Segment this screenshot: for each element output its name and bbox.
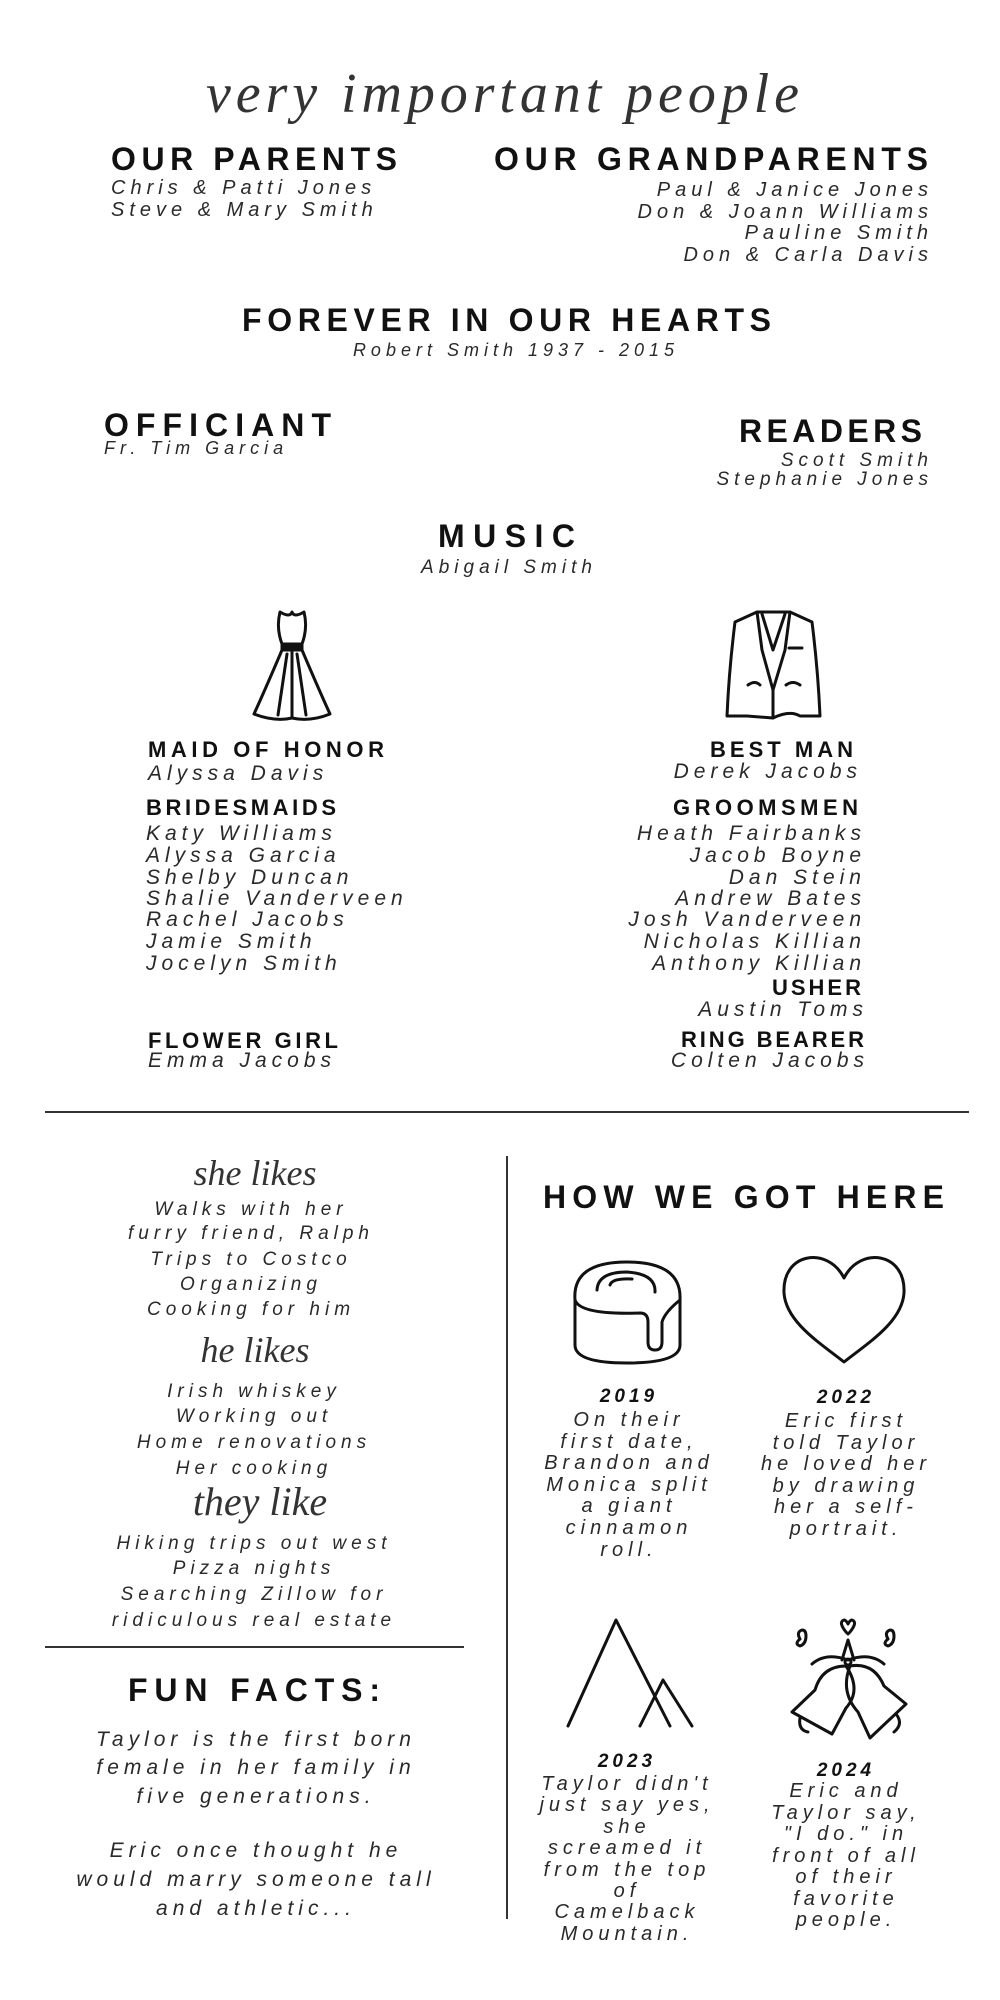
panel: grandparents: Paul & Janice Jones — [657, 179, 933, 201]
panel: groomsmen: Dan Stein — [729, 866, 866, 889]
panel: groomsmen: Anthony Killian — [650, 952, 866, 975]
panel: likes: Trips to Costco — [150, 1249, 352, 1270]
panel: readers: Stephanie Jones — [716, 469, 933, 490]
icon: mountain — [568, 1620, 692, 1726]
panel: likes: Working out — [176, 1406, 332, 1427]
panel: groomsmen: Heath Fairbanks — [637, 822, 866, 845]
panel: fun facts: and athletic... — [156, 1897, 356, 1920]
panel: parents — [111, 141, 397, 221]
panel: readers: READERS — [739, 413, 922, 449]
panel: likes: Irish whiskey — [167, 1381, 341, 1402]
panel: best man — [674, 737, 862, 783]
panel: flower girl — [148, 1028, 338, 1072]
timeline: 2019: Monica split — [546, 1474, 712, 1496]
panel: bridesmaids: Shalie Vanderveen — [146, 887, 408, 910]
panel: grandparents — [494, 141, 933, 266]
panel: usher: Austin Toms — [696, 998, 868, 1021]
panel: likes — [112, 1153, 396, 1631]
panel: usher: USHER — [772, 975, 861, 1000]
panel: maid of honor: MAID OF HONOR — [148, 737, 384, 762]
panel: officiant: OFFICIANT — [104, 407, 331, 443]
panel: likes: Walks with her — [154, 1199, 348, 1220]
panel: parents: Steve & Mary Smith — [111, 199, 378, 221]
timeline: 2024: front of all — [772, 1845, 920, 1867]
panel: music: MUSIC — [438, 518, 575, 554]
panel: bridesmaids: BRIDESMAIDS — [146, 795, 336, 820]
panel: usher — [696, 975, 868, 1021]
timeline: 2023: she — [603, 1816, 651, 1838]
panel: ring bearer: RING BEARER — [681, 1027, 864, 1052]
panel: grandparents: OUR GRANDPARENTS — [494, 141, 928, 177]
panel: fun facts: would marry someone tall — [76, 1868, 436, 1891]
panel: ring bearer — [671, 1027, 869, 1072]
timeline: 2024: 2024 — [816, 1760, 875, 1781]
panel: likes: they like — [193, 1479, 327, 1524]
panel: music: Abigail Smith — [420, 557, 597, 578]
panel: likes: Cooking for him — [147, 1299, 355, 1320]
panel: parents: Chris & Patti Jones — [111, 177, 376, 199]
panel: likes: Hiking trips out west — [116, 1533, 392, 1554]
timeline: 2024: "I do." in — [784, 1823, 908, 1845]
panel: bridesmaids: Jocelyn Smith — [145, 952, 342, 975]
panel: flower girl: Emma Jacobs — [148, 1049, 336, 1072]
panel: likes: Home renovations — [137, 1432, 371, 1453]
panel: officiant: Fr. Tim Garcia — [104, 438, 288, 458]
panel: forever in our hearts — [242, 302, 771, 360]
timeline: 2022 — [761, 1387, 931, 1540]
panel: fun facts — [76, 1672, 436, 1920]
timeline: 2019: a giant — [581, 1495, 677, 1517]
timeline: 2023: screamed it — [548, 1837, 706, 1859]
timeline: 2022: by drawing — [773, 1475, 919, 1497]
heading: how we got here: HOW WE GOT HERE — [543, 1179, 944, 1215]
timeline: 2022: he loved her — [761, 1453, 931, 1475]
timeline: 2022: portrait. — [789, 1518, 902, 1540]
timeline: 2022: her a self- — [774, 1496, 918, 1518]
panel: readers — [716, 413, 933, 490]
timeline: 2023: Camelback — [554, 1901, 700, 1923]
icon: bells — [792, 1620, 906, 1738]
timeline: 2022: 2022 — [816, 1387, 875, 1408]
timeline: 2023: of — [614, 1880, 640, 1902]
panel: best man: Derek Jacobs — [674, 760, 862, 783]
icon: suit — [727, 612, 820, 718]
panel: likes: Pizza nights — [173, 1558, 335, 1579]
panel: bridesmaids: Jamie Smith — [145, 930, 317, 953]
icon: heart — [784, 1258, 904, 1362]
timeline: 2022: told Taylor — [773, 1432, 919, 1454]
panel: likes: Her cooking — [176, 1458, 332, 1479]
panel: bridesmaids — [144, 795, 408, 975]
timeline: 2024: Taylor say, — [771, 1802, 921, 1824]
timeline: 2024: favorite — [793, 1888, 899, 1910]
timeline: 2023: from the top — [544, 1859, 710, 1881]
panel: likes: ridiculous real estate — [112, 1610, 396, 1631]
panel: parents: OUR PARENTS — [111, 141, 397, 177]
timeline: 2022: Eric first — [785, 1410, 907, 1432]
icon: dress — [254, 612, 330, 719]
panel: maid of honor — [146, 737, 384, 785]
panel: music — [420, 518, 597, 578]
panel: forever in our hearts: Robert Smith 1937 - 2015 — [353, 340, 679, 360]
panel: fun facts: five generations. — [136, 1785, 376, 1808]
panel: best man: BEST MAN — [710, 737, 853, 762]
panel: grandparents: Don & Carla Davis — [683, 244, 933, 266]
timeline: 2024: of their — [795, 1866, 897, 1888]
panel: groomsmen: Andrew Bates — [673, 887, 866, 910]
icon: cinnamon roll — [575, 1262, 680, 1363]
panel: likes: Searching Zillow for — [121, 1584, 387, 1605]
timeline: 2019: first date, — [560, 1431, 698, 1453]
timeline: 2019: cinnamon — [566, 1517, 692, 1539]
panel: bridesmaids: Rachel Jacobs — [146, 908, 349, 931]
panel: fun facts: Eric once thought he — [110, 1839, 402, 1862]
panel: bridesmaids: Alyssa Garcia — [144, 844, 341, 867]
panel: groomsmen: Josh Vanderveen — [627, 908, 866, 931]
timeline: 2023 — [536, 1751, 715, 1945]
panel: likes: furry friend, Ralph — [128, 1223, 374, 1244]
panel: grandparents: Pauline Smith — [745, 222, 933, 244]
timeline: 2019: On their — [573, 1409, 685, 1431]
panel: ring bearer: Colten Jacobs — [671, 1049, 869, 1072]
panel: fun facts: Taylor is the first born — [96, 1728, 416, 1751]
panel: bridesmaids: Shelby Duncan — [146, 866, 353, 889]
panel: fun facts: female in her family in — [96, 1756, 416, 1779]
panel: likes: Organizing — [180, 1274, 322, 1295]
panel: maid of honor: Alyssa Davis — [146, 762, 328, 785]
panel: forever in our hearts: FOREVER IN OUR HEARTS — [242, 302, 771, 338]
panel: groomsmen: Jacob Boyne — [689, 844, 866, 867]
timeline: 2024 — [771, 1760, 921, 1931]
timeline: 2024: people. — [795, 1909, 896, 1931]
panel: grandparents: Don & Joann Williams — [638, 201, 933, 223]
timeline: 2019: roll. — [600, 1539, 658, 1561]
panel: likes: she likes — [194, 1153, 316, 1193]
timeline: 2019: Brandon and — [544, 1452, 714, 1474]
timeline: 2019: 2019 — [599, 1386, 658, 1407]
panel: likes: he likes — [201, 1330, 309, 1370]
panel: groomsmen: Nicholas Killian — [644, 930, 866, 953]
timeline: 2019 — [544, 1386, 714, 1561]
panel: groomsmen: GROOMSMEN — [673, 795, 858, 820]
panel: groomsmen — [627, 795, 866, 975]
timeline: 2024: Eric and — [789, 1780, 903, 1802]
panel: flower girl: FLOWER GIRL — [148, 1028, 338, 1053]
panel: bridesmaids: Katy Williams — [146, 822, 337, 845]
title: very important people — [206, 63, 799, 125]
timeline: 2023: Mountain. — [561, 1923, 693, 1945]
panel: readers: Scott Smith — [781, 450, 933, 471]
timeline: 2023: Taylor didn't — [541, 1773, 713, 1795]
timeline: 2023: just say yes, — [536, 1794, 715, 1816]
panel: fun facts: FUN FACTS: — [128, 1672, 380, 1708]
timeline: 2023: 2023 — [597, 1751, 656, 1772]
